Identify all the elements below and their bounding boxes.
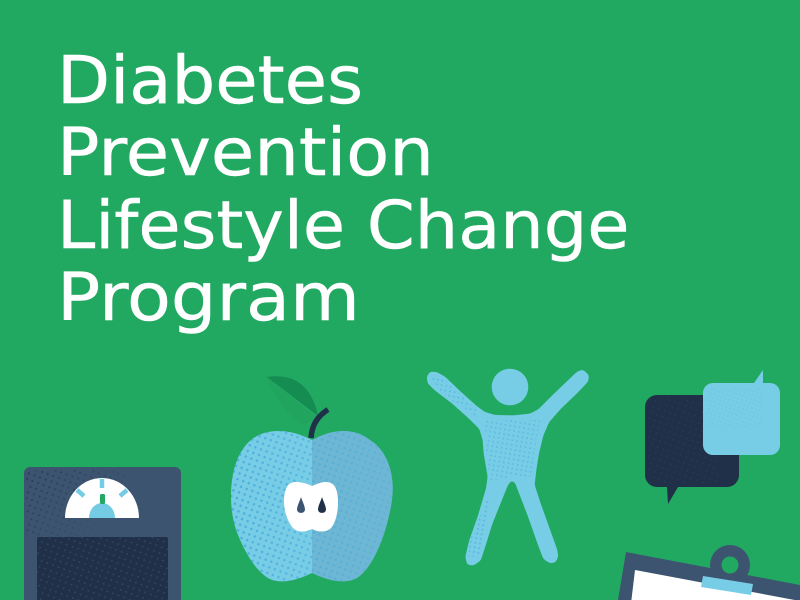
dark speech bubble (645, 395, 739, 504)
icon: clipboard (618, 545, 800, 600)
icon: apple (228, 376, 396, 586)
title (57, 42, 630, 336)
title: Program (57, 259, 360, 336)
icon: person with raised arms (427, 369, 589, 566)
title: Lifestyle Change (57, 187, 630, 264)
light speech bubble (703, 370, 780, 455)
icon: bathroom scale (24, 467, 181, 600)
title: Prevention (57, 114, 434, 191)
icon: speech bubbles (645, 370, 780, 504)
title: Diabetes (57, 42, 363, 119)
